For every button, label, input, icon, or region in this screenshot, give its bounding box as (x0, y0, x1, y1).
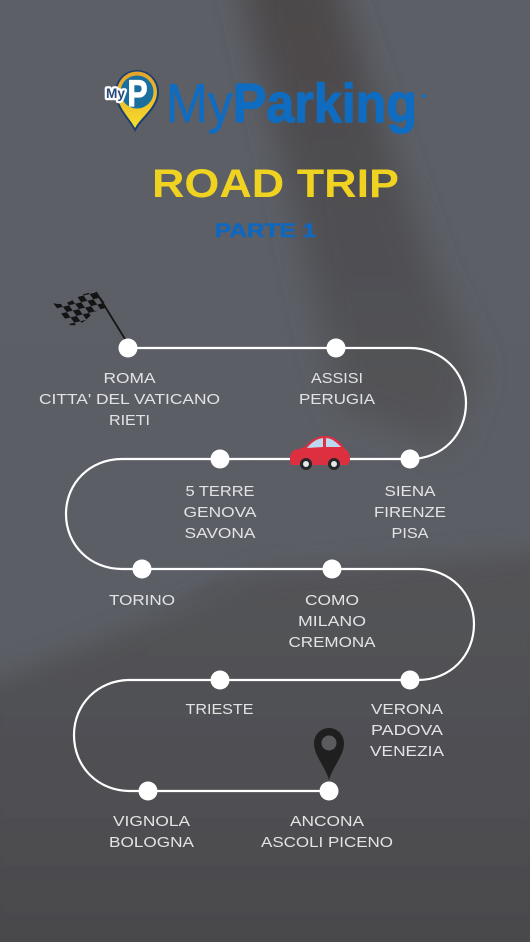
label: Como: CREMONA (288, 634, 376, 651)
logo wordmark: MyParking (166, 72, 417, 134)
label: Assisi: PERUGIA (299, 391, 375, 408)
title: ROAD TRIP (152, 162, 399, 206)
winding route line (66, 348, 474, 791)
label: Assisi (299, 370, 375, 408)
logo: MyParking (106, 70, 426, 134)
icon: checkered flag (53, 292, 125, 339)
route stops (118, 338, 420, 800)
label: Roma (39, 370, 220, 429)
label: Ancona: ASCOLI PICENO (261, 834, 393, 851)
icon: destination pin (314, 728, 344, 780)
label: Siena: FIRENZE (374, 504, 446, 521)
label: 5 Terre (184, 483, 256, 542)
icon: logo map pin: P (128, 73, 148, 114)
label: Verona: PADOVA (371, 722, 443, 739)
label: Vignola: VIGNOLA (113, 813, 190, 830)
label: Siena (374, 483, 446, 542)
label: Vignola (109, 813, 194, 851)
icon: logo map pin: My (106, 85, 125, 101)
label: Verona (370, 701, 444, 760)
label: Verona: VERONA (371, 701, 443, 718)
subtitle: PARTE 1 (215, 221, 317, 242)
label: Roma: RIETI (109, 412, 150, 429)
label: 5 Terre: 5 TERRE (186, 483, 254, 500)
label: Siena: PISA (392, 525, 428, 542)
label: 5 Terre: SAVONA (184, 525, 256, 542)
label: Verona: VENEZIA (370, 743, 444, 760)
label: Siena: SIENA (384, 483, 436, 500)
label: Como: COMO (305, 592, 359, 609)
label: Como (288, 592, 376, 651)
label: Como: MILANO (298, 613, 366, 630)
icon: logo map pin (106, 70, 159, 132)
label: Roma: ROMA (104, 370, 156, 387)
label: 5 Terre: GENOVA (184, 504, 256, 521)
label: Assisi: ASSISI (311, 370, 363, 387)
logo registered mark (422, 94, 426, 98)
label: Ancona (261, 813, 393, 851)
label: Torino: TORINO (109, 592, 175, 609)
label: Trieste: TRIESTE (186, 701, 254, 718)
label: Ancona: ANCONA (290, 813, 364, 830)
icon: red car (290, 436, 350, 470)
label: Vignola: BOLOGNA (109, 834, 194, 851)
label: Roma: CITTA' DEL VATICANO (39, 391, 220, 408)
